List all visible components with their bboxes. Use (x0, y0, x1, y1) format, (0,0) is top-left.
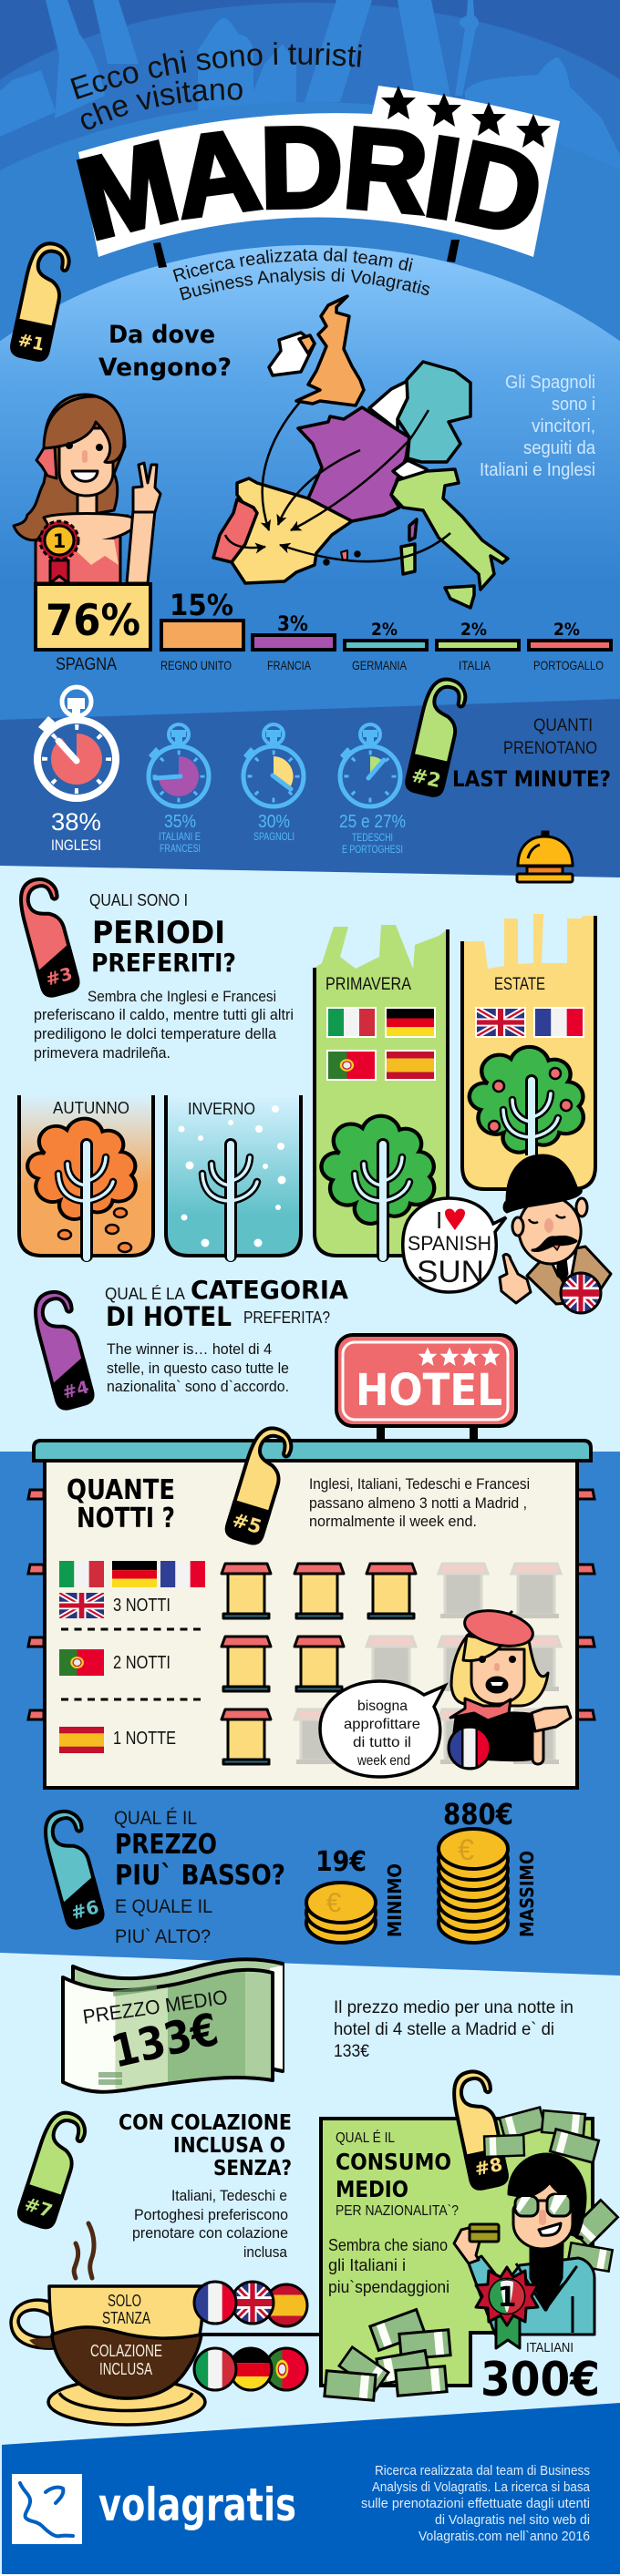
panel: quante notti hotel building (28, 1441, 594, 1788)
French flag badge (449, 1727, 491, 1769)
panel: inverno: INVERNO (188, 1100, 255, 1118)
stopwatch: italiani e francesi 35% (149, 724, 209, 855)
bar Portogallo 2% (529, 620, 611, 672)
subtitle: research credit: Ricerca realizzata dal team di (173, 248, 413, 282)
heading: quante notti: NOTTI ? (77, 1503, 175, 1534)
hair back (509, 2154, 585, 2239)
text: consumo description (328, 2236, 450, 2296)
bare tree (202, 1144, 257, 1257)
speech bubble: I love Spanish sun: SPANISH (408, 1232, 491, 1255)
heading: consumo medio: QUAL É IL (336, 2129, 395, 2146)
text: periodi description: primevera madrileña. (34, 1044, 170, 1062)
row labels: flags and nights: 1 NOTTE (113, 1729, 176, 1749)
hanger #5: #5 (230, 1509, 264, 1538)
flags estate (475, 1007, 584, 1038)
face (471, 1649, 524, 1704)
row labels: flags and nights: 2 NOTTI (113, 1653, 170, 1673)
bar Regno Unito 15%: REGNO UNITO (160, 658, 232, 672)
bar Germania 2%: 2% (371, 620, 398, 640)
hair back (14, 395, 125, 540)
heading: prezzo piu basso: QUAL É IL (114, 1808, 197, 1829)
heading: con colazione: CON COLAZIONE (119, 2111, 292, 2135)
coin stack: minimo 19 euro: € (326, 1888, 342, 1918)
text: Gli Spagnoli vincitori: Gli Spagnoli (505, 373, 595, 393)
text: prezzo medio description: hotel di 4 stelle a Madrid e` di (334, 2020, 554, 2039)
text: hotel description: stelle, in questo caso tutte le (107, 1360, 289, 1377)
heading: consumo medio: MEDIO (336, 2176, 408, 2202)
bar Portogallo 2%: 2% (553, 620, 580, 640)
United Kingdom (296, 296, 364, 405)
icon: coffee cup on saucer: STANZA (102, 2309, 150, 2327)
hanger #5 (224, 1423, 295, 1546)
hanger #6: #6 (68, 1895, 101, 1924)
text: prezzo medio description: Il prezzo medio per una notte in (334, 1998, 574, 2017)
body (451, 1713, 534, 1760)
text: Gli Spagnoli vincitori (480, 373, 596, 480)
panel: inverno (166, 1095, 301, 1257)
logo: volagratis: volagratis (98, 2479, 296, 2531)
flying banknotes top (484, 2108, 618, 2272)
hair (451, 1627, 548, 1706)
text: footer credits: sulle prenotazioni effettuate dagli utenti (361, 2496, 590, 2511)
text: colazione description (132, 2187, 288, 2261)
row labels: flags and nights: 3 NOTTI (113, 1596, 170, 1616)
heading: quanti prenotano last minute: PRENOTANO (503, 739, 597, 758)
heading: prezzo piu basso: PIU` ALTO? (115, 1926, 211, 1947)
heading: quante notti (67, 1474, 175, 1534)
text: quante notti description (309, 1475, 530, 1530)
steam (74, 2223, 94, 2278)
heading: consumo medio: CONSUMO (336, 2149, 451, 2175)
coin stack: minimo 19 euro: MINIMO (384, 1863, 406, 1937)
heading: prezzo piu basso: E QUALE IL (115, 1896, 212, 1917)
hanger #3: #3 (44, 964, 75, 990)
heading: quanti prenotano last minute: QUANTI (533, 716, 593, 735)
heading: categoria di hotel: CATEGORIA (191, 1275, 348, 1305)
text: prezzo medio description (334, 1998, 574, 2061)
pointing hand (500, 1255, 531, 1303)
text: periodi description: Sembra che Inglesi e Francesi (88, 988, 276, 1005)
hanger #7 (16, 2108, 89, 2231)
scarf (450, 1699, 511, 1720)
bar Germania 2% (345, 620, 427, 672)
map of Europe (213, 296, 508, 608)
panel: primavera (315, 925, 448, 1257)
arm and hand (532, 1727, 543, 1764)
text: prezzo medio description: 133€ (334, 2042, 369, 2061)
stopwatch: inglesi 38% (37, 687, 116, 854)
heading: Da dove Vengono: Vengono? (98, 354, 232, 382)
connector line (201, 2333, 324, 2336)
hanger #6 (39, 1807, 107, 1930)
hat (504, 1155, 581, 1212)
bar Italia 2%: ITALIA (459, 658, 491, 672)
heading: con colazione: INCLUSA O (173, 2134, 285, 2158)
icon: hotel bell (517, 832, 573, 882)
heading: consumo medio: PER NAZIONALITA`? (336, 2203, 459, 2219)
Germany (398, 362, 470, 462)
rosette #1 (40, 521, 78, 583)
heading: periodi preferiti: PERIODI (92, 915, 225, 951)
speech bubble: bisogna approfittare: approfittare (344, 1717, 420, 1732)
eyes nose mouth (480, 1657, 514, 1692)
handle (11, 2300, 53, 2348)
text: Gli Spagnoli vincitori: sono i (552, 395, 595, 415)
heading: periodi preferiti: PREFERITI? (91, 948, 236, 978)
coffee liquid (52, 2327, 202, 2398)
text: colazione description: Portoghesi preferiscono (134, 2206, 288, 2223)
bar Francia 3%: FRANCIA (267, 658, 312, 672)
flower (36, 446, 57, 478)
hanger #4 (29, 1288, 97, 1411)
hair fringe (44, 396, 124, 462)
cup body top (49, 2286, 203, 2398)
heading: consumo medio (336, 2129, 459, 2219)
bar Francia 3%: 3% (277, 613, 308, 636)
character: Italian man (454, 2154, 594, 2348)
flag badges: solo stanza (194, 2282, 307, 2326)
text: consumo description: Sembra che siano (328, 2236, 448, 2254)
arrows to Spain (225, 401, 450, 561)
falling leaves (58, 1208, 131, 1252)
character: Spanish woman (14, 395, 160, 583)
text: periodi description (34, 988, 294, 1062)
stopwatch: spagnoli 30%: SPAGNOLI (253, 830, 294, 843)
title: intro curved text (70, 42, 362, 129)
title: intro curved text: Ecco chi sono i turisti (70, 42, 362, 99)
Corsica (409, 519, 417, 540)
hanger #4: #4 (60, 1377, 91, 1403)
heading: periodi preferiti (89, 891, 236, 978)
heading: categoria di hotel: DI HOTEL (106, 1301, 232, 1332)
fringe (463, 1636, 503, 1661)
raised arm and hand (127, 510, 155, 583)
heading: categoria di hotel: PREFERITA? (243, 1309, 330, 1327)
stopwatch: tedeschi e portoghesi 25 e 27%: 25 e 27% (339, 812, 406, 832)
title banner: MADRID sign: MADRID (77, 126, 539, 241)
speech bubble: bisogna approfittare (320, 1681, 445, 1777)
banknotes pile (325, 2310, 450, 2400)
rosette #1 (476, 2267, 538, 2348)
text: colazione description: prenotare con colazione (132, 2224, 288, 2242)
panel: primavera: PRIMAVERA (326, 975, 411, 994)
stopwatch: tedeschi e portoghesi 25 e 27%: TEDESCHI (352, 831, 393, 844)
icon: coffee cup on saucer: COLAZIONE (90, 2342, 162, 2360)
label: italiani 300 euro: 300€ (480, 2353, 600, 2407)
heading: con colazione (119, 2111, 292, 2181)
black neck (531, 2243, 563, 2310)
speech bubble: I love Spanish sun: I (436, 1206, 442, 1234)
UK flag badge (561, 1273, 601, 1313)
icon: coffee cup on saucer (11, 2223, 205, 2425)
suit (527, 1247, 611, 1304)
heading: con colazione: SENZA? (213, 2157, 292, 2181)
bar chart: country shares (36, 584, 611, 674)
text: colazione description: inclusa (243, 2243, 287, 2261)
bar Francia 3% (253, 613, 335, 672)
text: footer credits: di Volagratis nel sito web di (435, 2512, 590, 2528)
Sardinia (401, 544, 415, 574)
character: English man (500, 1155, 611, 1313)
logo: volagratis (12, 2474, 296, 2544)
text: periodi description: prediligono le dolci temperature della (34, 1025, 277, 1042)
heading: Da dove Vengono: Da dove (108, 321, 215, 349)
beret (461, 1605, 536, 1652)
heading: quanti prenotano last minute (452, 716, 611, 792)
sign posts (153, 240, 460, 268)
row labels: flags and nights (59, 1561, 205, 1753)
heading: prezzo piu basso: PREZZO (115, 1829, 217, 1861)
bar Italia 2%: 2% (460, 620, 487, 640)
hanger #3 (15, 875, 82, 998)
stopwatch: tedeschi e portoghesi 25 e 27%: E PORTOGHESI (342, 843, 403, 856)
speech bubble: I love Spanish sun (403, 1198, 506, 1292)
hanger #1 (10, 240, 72, 362)
hanger #8: #8 (472, 2153, 504, 2181)
character: French woman (449, 1605, 571, 1769)
bar Regno Unito 15%: 15% (170, 588, 233, 622)
banknote: prezzo medio 133 euro: 133€ (107, 2004, 223, 2078)
Benelux (369, 381, 408, 430)
banknote: prezzo medio 133 euro: PREZZO MEDIO (81, 1986, 229, 2028)
hanger #2 (405, 675, 469, 797)
panel: consumo medio (321, 2119, 593, 2386)
panel: autunno: AUTUNNO (53, 1099, 129, 1117)
subtitle: research credit: Business Analysis di Volagratis (179, 268, 430, 301)
hotel sign (336, 1335, 516, 1443)
four stars (381, 86, 551, 148)
stopwatch: inglesi 38%: INGLESI (51, 836, 101, 854)
hand with card (454, 2227, 480, 2263)
neck (78, 487, 97, 517)
Switzerland (393, 460, 427, 480)
speech bubble: I love Spanish sun: SUN (417, 1255, 484, 1289)
bar Regno Unito 15% (160, 588, 243, 672)
face (59, 428, 113, 496)
Ireland (269, 333, 315, 375)
text: periodi description: preferiscano il caldo, mentre tutti gli altri (34, 1006, 294, 1023)
bar Spagna 76%: SPAGNA (56, 655, 117, 674)
Sicily (445, 586, 474, 608)
coin stack: minimo 19 euro: 19€ (315, 1846, 367, 1878)
sunglasses, nose and smile (515, 2194, 571, 2235)
coin stack: minimo 19 euro (306, 1846, 406, 1943)
text: quante notti description: Inglesi, Italiani, Tedeschi e Francesi (309, 1475, 530, 1493)
hanger #1: #1 (16, 330, 46, 355)
stopwatch: tedeschi e portoghesi 25 e 27% (339, 724, 406, 856)
pictogram: columns for nights (222, 1564, 561, 1764)
side brackets (28, 1490, 594, 1719)
saucer (48, 2379, 205, 2425)
bar Italia 2% (437, 620, 519, 672)
text: hotel description (107, 1340, 289, 1395)
text: footer credits: Volagratis.com nell`anno 2016 (418, 2529, 590, 2544)
banknote: prezzo medio 133 euro (63, 1959, 283, 2092)
text: colazione description: Italiani, Tedeschi e (171, 2187, 287, 2204)
title: intro curved text: che visitano (80, 80, 243, 129)
panel: autunno (19, 1095, 153, 1257)
flags primavera (326, 1007, 436, 1081)
text: footer credits: Ricerca realizzata dal team di Business (375, 2463, 590, 2479)
panel: estate: ESTATE (494, 975, 545, 994)
heading: categoria di hotel: QUAL É LA (105, 1285, 185, 1303)
stopwatch: spagnoli 30% (243, 724, 304, 843)
text: Gli Spagnoli vincitori: vincitori, (532, 416, 595, 436)
text: hotel description: nazionalita` sono d`accordo. (107, 1378, 289, 1395)
jacket (469, 2256, 594, 2335)
Spain (232, 478, 352, 583)
label: italiani 300 euro: ITALIANI (526, 2340, 574, 2355)
face (513, 2182, 573, 2249)
stopwatch: inglesi 38%: 38% (51, 808, 101, 836)
text: quante notti description: passano almeno 3 notti a Madrid , (309, 1494, 527, 1512)
icon: coffee cup on saucer: INCLUSA (99, 2360, 152, 2378)
speech bubble: bisogna approfittare: di tutto il (353, 1735, 411, 1750)
stopwatch: italiani e francesi 35%: ITALIANI E (159, 830, 201, 843)
hanger #7: #7 (22, 2192, 55, 2222)
panel: estate (462, 914, 595, 1194)
heading: periodi preferiti: QUALI SONO I (89, 891, 188, 909)
text: footer credits (361, 2463, 591, 2544)
Italy (391, 469, 508, 590)
speech bubble: bisogna approfittare: bisogna (357, 1699, 408, 1714)
tree primavera (322, 1116, 434, 1257)
icon: coffee cup on saucer: SOLO (108, 2292, 141, 2310)
heading: quante notti: QUANTE (67, 1474, 175, 1506)
heading: prezzo piu basso: PIU` BASSO? (115, 1860, 285, 1892)
text: consumo description: gli Italiani i (328, 2256, 406, 2274)
heading: categoria di hotel (105, 1275, 348, 1332)
four stars (418, 1348, 500, 1366)
text: Gli Spagnoli vincitori: seguiti da (523, 438, 596, 458)
coin stack: massimo 880 euro: € (458, 1833, 474, 1866)
stopwatch: italiani e francesi 35%: 35% (164, 812, 196, 832)
text: consumo description: piu`spendaggioni (328, 2278, 450, 2296)
bar Spagna 76% (36, 584, 150, 674)
coin stack: massimo 880 euro (439, 1797, 538, 1943)
snowflakes (179, 1105, 286, 1247)
heading: Da dove Vengono (98, 321, 232, 382)
coin stack: massimo 880 euro: 880€ (443, 1797, 513, 1832)
dress (36, 516, 133, 583)
tree estate with fruit (470, 1047, 584, 1194)
coin stack: massimo 880 euro: MASSIMO (516, 1851, 538, 1937)
heading: prezzo piu basso (114, 1808, 285, 1947)
Portugal (213, 499, 257, 562)
text: quante notti description: normalmente il week end. (309, 1513, 477, 1530)
bar Portogallo 2%: PORTOGALLO (533, 658, 604, 672)
text: footer credits: Analysis di Volagratis. La ricerca si basa (372, 2479, 591, 2495)
subtitle: research credit (173, 248, 430, 301)
icon: heart (445, 1208, 465, 1230)
tree autunno (27, 1119, 136, 1257)
text: hotel description: The winner is… hotel di 4 (107, 1340, 272, 1358)
hanger #8 (449, 2068, 511, 2191)
hotel sign: HOTEL (356, 1365, 502, 1416)
bar Germania 2%: GERMANIA (352, 658, 408, 672)
flag badges: colazione inclusa (194, 2348, 307, 2390)
Balearic islands (325, 550, 359, 564)
rosette #1: 1 (498, 2282, 516, 2314)
hanger #2: #2 (409, 764, 443, 792)
stopwatch: italiani e francesi 35%: FRANCESI (160, 842, 201, 855)
face (513, 1192, 586, 1268)
text: Gli Spagnoli vincitori: Italiani e Inglesi (480, 460, 595, 480)
lapels (516, 2263, 576, 2333)
eyes, nose, moustache (529, 1215, 576, 1251)
bar Spagna 76%: 76% (46, 596, 140, 646)
rosette #1: 1 (53, 530, 66, 552)
France (298, 407, 409, 521)
eyes, nose and smile (67, 443, 102, 481)
stopwatch: spagnoli 30%: 30% (258, 812, 290, 832)
speech bubble: bisogna approfittare: week end (356, 1753, 410, 1769)
